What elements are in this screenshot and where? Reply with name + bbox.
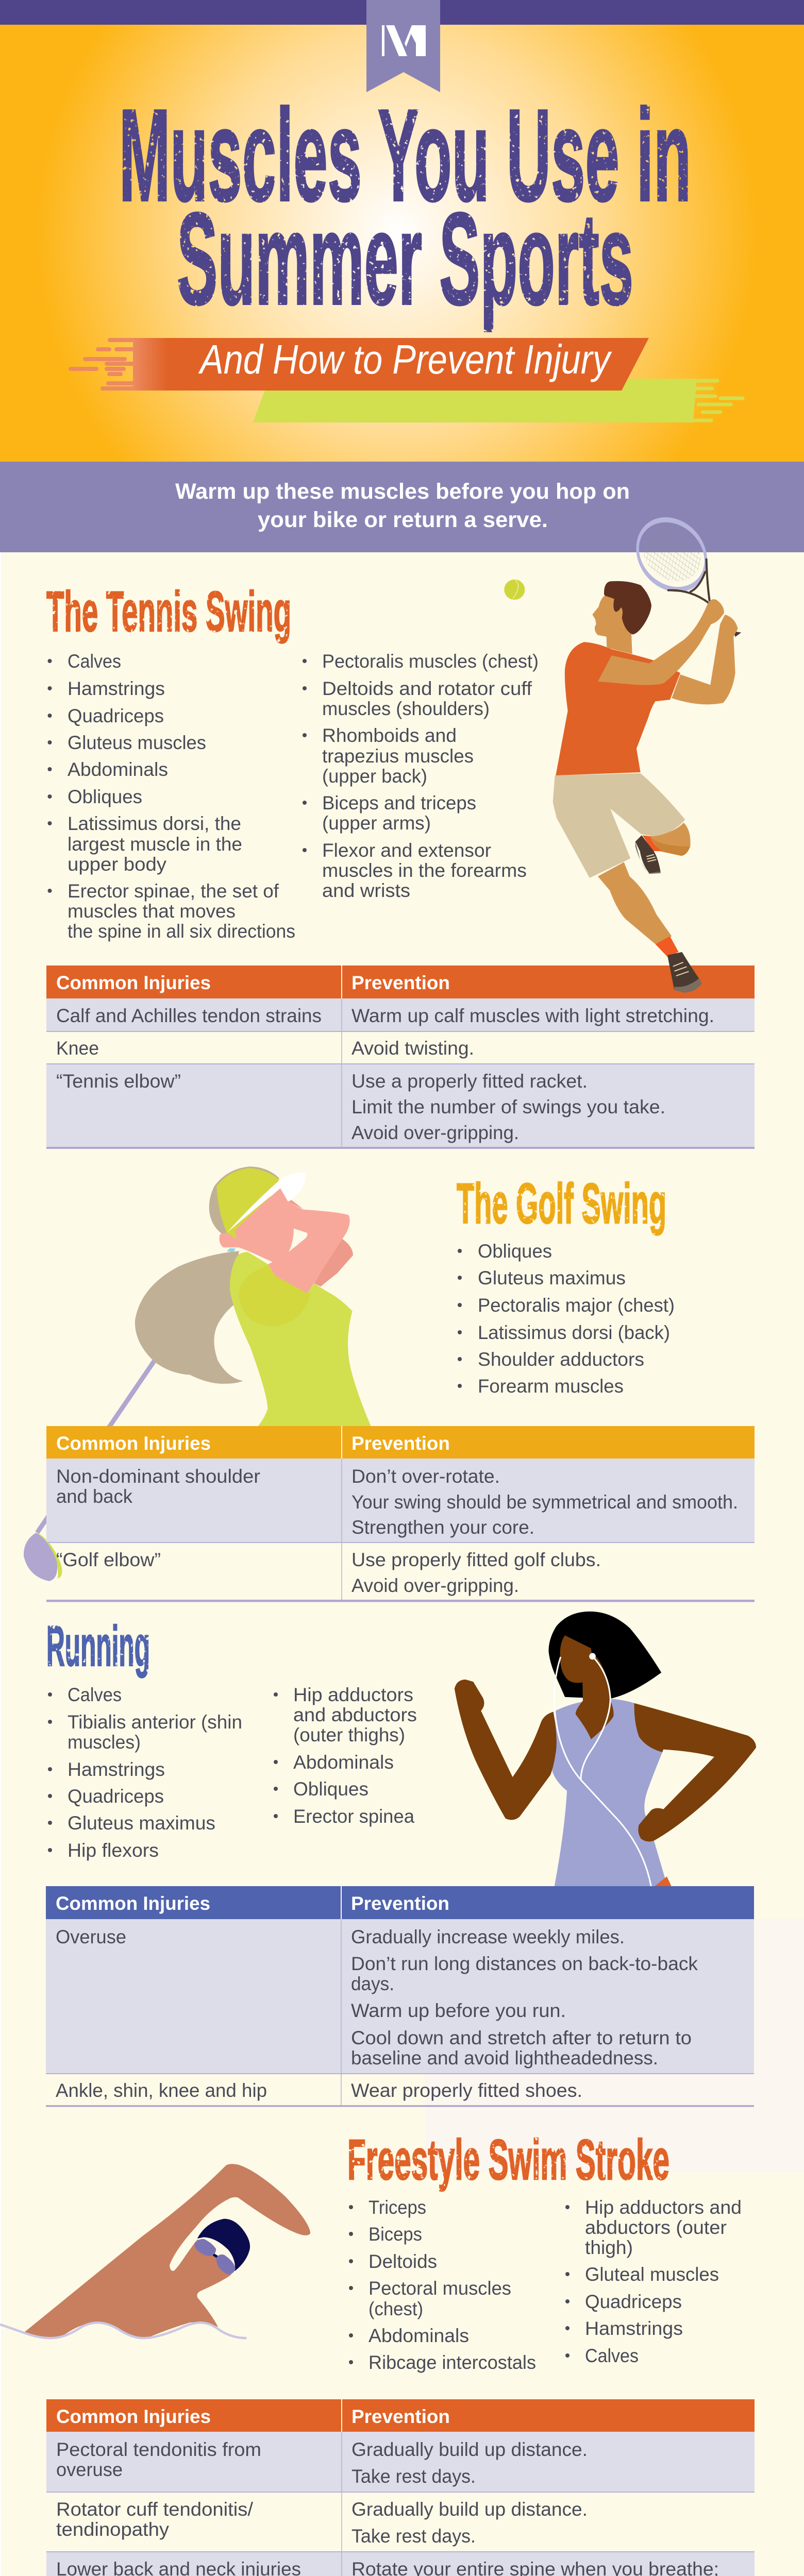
table: running injuries: Cool down and stretch after to return to (351, 2027, 692, 2048)
list: running muscles right: Erector spinea (293, 1806, 414, 1827)
illustration: golf club (24, 1361, 154, 1581)
table: swim injuries: tendinopathy (56, 2519, 170, 2540)
list: swim muscles left: Ribcage intercostals (368, 2352, 536, 2373)
list: swim muscles right: Hamstrings (585, 2318, 683, 2339)
table: swim injuries: Common Injuries (56, 2406, 211, 2427)
visor brim (227, 1173, 306, 1233)
list: running muscles left: muscles) (68, 1732, 141, 1753)
list: swim muscles left: (chest) (368, 2298, 423, 2319)
list: running muscles right (274, 1684, 417, 1827)
list: tennis muscles right: Biceps and triceps (322, 792, 476, 814)
header panel (0, 0, 804, 462)
list: tennis muscles right (303, 651, 539, 901)
top bar (0, 0, 804, 25)
intro band: your bike or return a serve. (258, 507, 548, 532)
list: golf muscles: Forearm muscles (478, 1376, 624, 1397)
table: running injuries: Prevention (351, 1893, 449, 1914)
list: swim muscles right: Hip adductors and (585, 2197, 742, 2218)
list: running muscles right: Hip adductors (293, 1684, 413, 1705)
illustration: golfer (135, 1166, 371, 1426)
table: swim injuries: Gradually build up distance. (351, 2439, 588, 2460)
list: swim muscles right: Gluteal muscles (585, 2264, 719, 2285)
top (230, 1252, 371, 1426)
list: tennis muscles right: muscles in the forearms (322, 860, 527, 881)
list: golf muscles: Obliques (478, 1241, 552, 1262)
list: tennis muscles right: and wrists (322, 880, 410, 901)
list: tennis muscles left: the spine in all six directions (68, 921, 295, 942)
list: tennis muscles left: Calves (68, 651, 121, 672)
list: tennis muscles right: (upper arms) (322, 812, 431, 834)
list: tennis muscles left: Hamstrings (68, 678, 165, 699)
ponytail (135, 1250, 248, 1384)
ribbon with logo mark (366, 0, 440, 92)
list: swim muscles left: Biceps (368, 2224, 422, 2245)
table: swim injuries: Prevention (351, 2406, 450, 2427)
table: tennis injuries: Calf and Achilles tendon strains (56, 1005, 322, 1026)
list: golf muscles (458, 1241, 675, 1397)
subtitle: And How to Prevent Injury (198, 336, 612, 382)
table: swim injuries: Rotator cuff tendonitis/ (56, 2499, 254, 2520)
hair (548, 1612, 661, 1699)
infographic canvas: Running (46, 1615, 150, 1678)
table: golf injuries: Prevention (351, 1433, 450, 1454)
list: running muscles left: Gluteus maximus (68, 1812, 215, 1834)
list: running muscles right: and abductors (293, 1704, 417, 1725)
racket (635, 512, 741, 637)
list: running muscles right: Obliques (293, 1778, 368, 1800)
table: golf injuries: Don’t over-rotate. (351, 1466, 500, 1487)
title (119, 82, 691, 332)
list: running muscles right: Abdominals (293, 1752, 394, 1773)
water wave (0, 2323, 246, 2338)
list: swim muscles left: Pectoral muscles (368, 2278, 511, 2299)
arm on hip (634, 1703, 756, 1841)
list: swim muscles left (349, 2197, 536, 2373)
table: golf injuries: Strengthen your core. (351, 1517, 534, 1538)
tennis ball (504, 580, 525, 600)
table: tennis injuries: Avoid twisting. (351, 1038, 474, 1059)
list: golf muscles: Gluteus maximus (478, 1267, 626, 1289)
list: tennis muscles right: Pectoralis muscles (chest) (322, 651, 539, 672)
intro band: Warm up these muscles before you hop on (175, 479, 630, 504)
table: swim injuries (46, 2399, 755, 2576)
list: swim muscles left: Triceps (368, 2197, 426, 2218)
body and arm (24, 2164, 310, 2338)
table: running injuries: Common Injuries (56, 1893, 210, 1914)
list: tennis muscles left: upper body (68, 854, 167, 875)
list: tennis muscles left: Gluteus muscles (68, 732, 206, 753)
table: swim injuries: Take rest days. (351, 2466, 476, 2487)
table: running injuries: baseline and avoid lightheadedness. (351, 2047, 658, 2069)
list: golf muscles: Shoulder adductors (478, 1349, 644, 1370)
list: tennis muscles right: Flexor and extensor (322, 840, 491, 861)
table: golf injuries (46, 1426, 755, 1602)
list: running muscles left: Hip flexors (68, 1840, 159, 1861)
list: swim muscles left: Deltoids (368, 2251, 437, 2272)
orange banner (71, 336, 649, 391)
face and neck (560, 1635, 614, 1739)
list: tennis muscles left: Erector spinae, the set of (68, 880, 279, 902)
table: golf injuries: Your swing should be symmetrical and smooth. (351, 1492, 738, 1513)
table: swim injuries: overuse (56, 2459, 123, 2480)
table: golf injuries: and back (56, 1486, 132, 1507)
standing leg (598, 862, 672, 944)
illustration: swimmer (0, 2164, 310, 2338)
list: swim muscles right: Calves (585, 2345, 639, 2366)
list: tennis muscles right: (upper back) (322, 766, 427, 787)
earphone cord (554, 1653, 651, 1887)
list: tennis muscles left: Latissimus dorsi, the (68, 813, 241, 834)
table: running injuries (46, 1886, 754, 2107)
table: golf injuries: Avoid over-gripping. (351, 1575, 519, 1596)
heading: The Tennis Swing: The Tennis Swing (46, 580, 291, 643)
list: tennis muscles left: Obliques (68, 786, 142, 807)
list: running muscles left (48, 1684, 242, 1861)
list: tennis muscles right: trapezius muscles (322, 745, 474, 767)
list: tennis muscles left: Quadriceps (68, 705, 164, 726)
bent leg (635, 823, 691, 874)
back arm (288, 1200, 353, 1286)
table: tennis injuries (46, 965, 755, 1149)
dress (552, 1699, 672, 1887)
list: running muscles left: Tibialis anterior (shin (68, 1711, 242, 1733)
list: tennis muscles left: Abdominals (68, 759, 168, 780)
table: golf injuries: Non-dominant shoulder (56, 1466, 260, 1487)
goggles (195, 2239, 236, 2275)
green banner (253, 379, 743, 422)
list: swim muscles right: Quadriceps (585, 2291, 682, 2312)
illustration: tennis player (504, 512, 741, 993)
table: golf injuries: “Golf elbow” (56, 1549, 161, 1570)
list: running muscles right: (outer thighs) (293, 1724, 405, 1745)
table: swim injuries: Gradually build up distance. (351, 2499, 588, 2520)
list: tennis muscles right: Deltoids and rotator cuff (322, 678, 532, 699)
list: tennis muscles right: muscles (shoulders) (322, 698, 490, 719)
list: golf muscles: Pectoralis major (chest) (478, 1295, 675, 1316)
table: swim injuries: Pectoral tendonitis from (56, 2439, 261, 2460)
head (592, 581, 651, 654)
raised arm (455, 1680, 557, 1820)
illustration: runner (455, 1612, 756, 1887)
list: running muscles left: Quadriceps (68, 1786, 164, 1807)
table: running injuries: Warm up before you run. (351, 2000, 566, 2021)
table: running injuries: Don’t run long distances on back-to-back (351, 1953, 698, 1974)
table: golf injuries: Common Injuries (56, 1433, 211, 1454)
list: swim muscles right: thigh) (585, 2237, 633, 2258)
list: swim muscles left: Abdominals (368, 2325, 469, 2346)
table: tennis injuries: Limit the number of swings you take. (351, 1096, 665, 1117)
list: tennis muscles left: muscles that moves (68, 901, 236, 922)
list: golf muscles: Latissimus dorsi (back) (478, 1322, 670, 1343)
list: tennis muscles left (47, 651, 295, 942)
shirt (556, 642, 680, 775)
table: tennis injuries: Warm up calf muscles with light stretching. (351, 1005, 714, 1026)
table: golf injuries: Use properly fitted golf clubs. (351, 1549, 601, 1570)
list: swim muscles right: abductors (outer (585, 2217, 727, 2238)
visor and hair (209, 1166, 279, 1239)
arms (598, 599, 738, 704)
list: tennis muscles right: Rhomboids and (322, 725, 457, 746)
table: tennis injuries: Prevention (351, 972, 450, 993)
table: tennis injuries: Use a properly fitted racket. (351, 1071, 588, 1092)
table: tennis injuries: Knee (56, 1038, 99, 1059)
list: running muscles left: Calves (68, 1684, 122, 1705)
list: running muscles left: Hamstrings (68, 1759, 165, 1780)
face and arm (220, 1188, 350, 1293)
intro band (0, 462, 804, 552)
table: tennis injuries: Avoid over-gripping. (351, 1122, 519, 1143)
swim cap (197, 2219, 250, 2271)
table: swim injuries: Take rest days. (351, 2526, 476, 2547)
table: running injuries: days. (351, 1973, 394, 1994)
table: running injuries: Overuse (56, 1926, 126, 1947)
list: swim muscles right (565, 2197, 742, 2366)
table: running injuries: Gradually increase weekly miles. (351, 1926, 625, 1947)
table: tennis injuries: Common Injuries (56, 972, 211, 993)
table: running injuries: Ankle, shin, knee and hip (56, 2080, 267, 2101)
table: running injuries: Wear properly fitted shoes. (351, 2080, 582, 2101)
shorts (553, 773, 685, 878)
table: tennis injuries: “Tennis elbow” (56, 1071, 181, 1092)
sock and shoe (656, 936, 702, 993)
list: tennis muscles left: largest muscle in the (68, 834, 242, 855)
